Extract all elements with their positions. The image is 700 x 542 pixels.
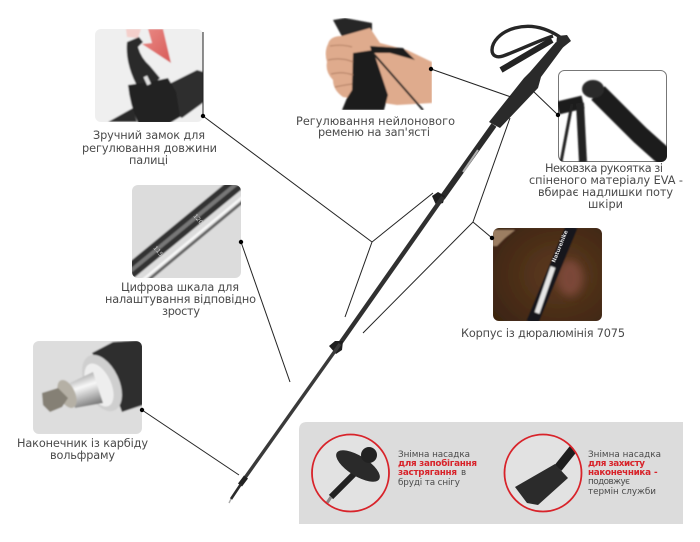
flange [56, 380, 77, 408]
lower clamp [329, 341, 343, 354]
icon: mud basket [312, 434, 390, 512]
grip leader [533, 91, 558, 115]
text: tip cover: наконечника [588, 468, 651, 478]
label: pole lock [82, 129, 217, 167]
cone [515, 464, 568, 505]
lock leader [203, 32, 433, 317]
thin strap [561, 104, 572, 162]
grip [489, 42, 564, 128]
text: tip cover: Знімна насадка [588, 450, 661, 460]
shaft [70, 372, 103, 408]
text: mud basket: застрягання [398, 468, 457, 478]
brand: Naturehike [551, 229, 570, 264]
metal pin [143, 76, 151, 85]
text: mud basket: в [461, 468, 466, 478]
tip collar [240, 477, 246, 485]
strap down [580, 103, 583, 162]
hand [326, 28, 432, 105]
label: EVA grip: шкіри [588, 198, 623, 211]
text: tip cover: - [654, 468, 658, 478]
tip [231, 484, 241, 499]
strap leader [431, 69, 511, 97]
lock lever [127, 37, 160, 86]
stone tip [42, 388, 68, 412]
lower section [242, 344, 340, 482]
pole [532, 226, 572, 323]
text: mud basket: бруді та снігу [398, 478, 460, 488]
text: tip cover: для захисту [588, 459, 645, 469]
fingers [328, 45, 353, 87]
label: digital scale [105, 281, 256, 318]
photo panel: hand with wrist strap [326, 18, 432, 110]
upper clamp [432, 192, 445, 205]
icon: red arrow [142, 29, 171, 63]
tip leader [142, 410, 239, 475]
text: tip cover: термін служби [588, 487, 656, 497]
text: mud basket: Знімна насадка [398, 450, 470, 460]
text: mud basket [398, 450, 477, 488]
leader lines [142, 32, 558, 475]
silver collar [82, 354, 124, 411]
photo panel: pole lock [94, 28, 204, 123]
strap band [558, 102, 583, 108]
leader dots [140, 67, 560, 412]
lock body [128, 78, 180, 123]
text: tip cover [588, 450, 661, 497]
wrist strap loop [492, 26, 560, 57]
label: aluminium body: Корпус із дюралюмінія 7075 [461, 327, 625, 340]
text: tip cover: подовжує [588, 477, 630, 487]
silver mark [463, 150, 478, 172]
serrated stripe [148, 200, 241, 278]
label: carbide tip: вольфраму [50, 449, 115, 462]
thin strap cord [373, 53, 423, 110]
scale number 1: 120 [191, 213, 204, 226]
label: pole lock: Зручний замок для [93, 129, 205, 142]
label: digital scale: налаштування відповідно [105, 293, 256, 306]
basket disc [331, 444, 385, 488]
grip knob [582, 80, 604, 98]
label: wrist strap [296, 115, 455, 139]
text: mud basket: для запобігання [398, 458, 477, 469]
white stripe [143, 196, 241, 278]
lock cylinder [170, 69, 202, 119]
grip top [332, 18, 374, 37]
label: carbide tip [17, 437, 148, 462]
stem tip [327, 497, 331, 503]
label: digital scale: зросту [162, 305, 200, 318]
pole [229, 26, 571, 503]
photo panel: digital scale [132, 185, 241, 278]
panel: removable attachments [299, 422, 683, 524]
stem [331, 474, 354, 497]
panel background [299, 422, 683, 524]
body leader [363, 118, 510, 333]
black body [92, 340, 143, 412]
label: EVA grip: вбирає надлишки поту [538, 186, 673, 199]
label: wrist strap: ременю на зап'ясті [318, 126, 430, 139]
pale arrow tail [126, 29, 141, 38]
middle section [339, 197, 443, 345]
label: EVA grip [529, 162, 683, 211]
white label [537, 267, 553, 313]
skin patch [493, 230, 515, 246]
tip point [229, 499, 231, 503]
label: digital scale: Цифрова шкала для [121, 281, 239, 294]
wrist strap band [501, 40, 552, 70]
scale number 2: 115 [151, 245, 164, 258]
basket knob [361, 447, 377, 463]
tube [558, 443, 578, 468]
scale leader [241, 242, 290, 382]
label: EVA grip: спіненого матеріалу EVA - [529, 174, 683, 187]
photo panel: EVA grip [558, 70, 668, 162]
strap [370, 46, 415, 60]
label: carbide tip: Наконечник із карбіду [17, 437, 148, 450]
label: pole lock: регулювання довжини [82, 142, 217, 155]
pole [132, 185, 241, 278]
background blotch [557, 260, 583, 296]
label: EVA grip: Нековзка рукоятка зі [545, 162, 663, 175]
label: wrist strap: Регулювання нейлонового [296, 115, 455, 128]
grip [598, 93, 668, 160]
upper section [442, 125, 494, 198]
label: pole lock: палиці [129, 154, 168, 167]
photo panel: aluminium body [492, 226, 603, 323]
grip lower [342, 50, 388, 110]
pole tube [108, 108, 137, 122]
grip top [556, 35, 571, 49]
photo panel: carbide tip [32, 340, 143, 435]
icon: tip cover [504, 434, 582, 512]
